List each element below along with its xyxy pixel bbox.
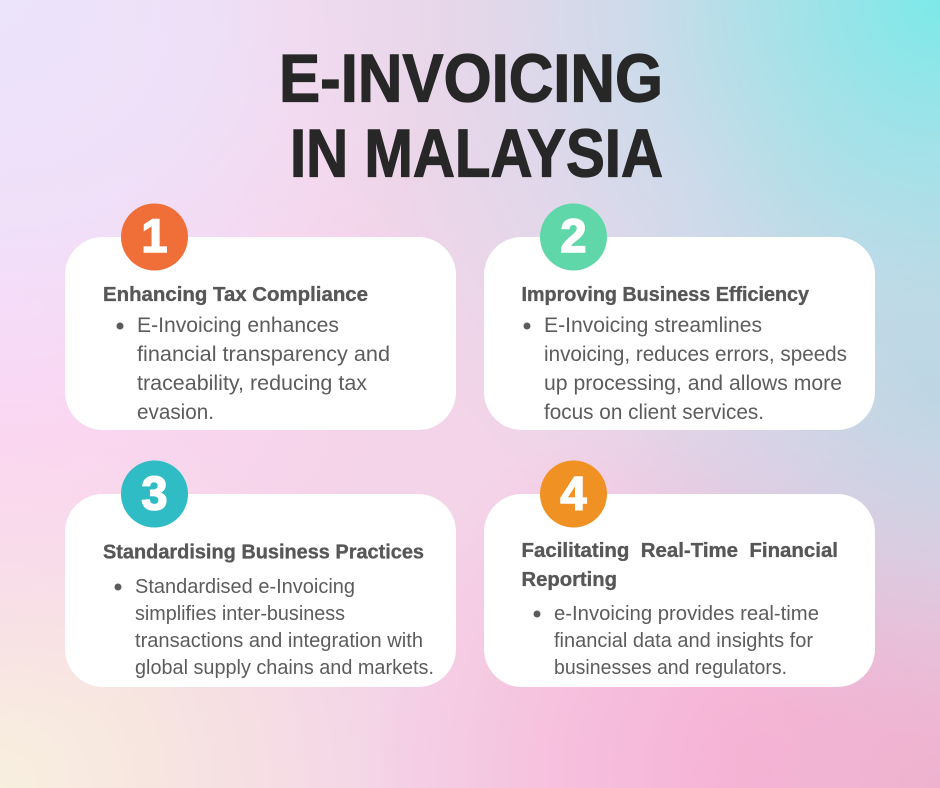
heading: facilitating real-time financial reporting: Facilitating Real-Time Financial — [522, 540, 838, 562]
bullet text: business efficiency: up processing, and allows more — [544, 372, 842, 395]
bullet text: tax compliance: evasion. — [137, 401, 214, 424]
bullet text: real-time reporting: businesses and regulators. — [554, 657, 787, 679]
bullet text: business efficiency: E-Invoicing streamlines — [544, 314, 762, 337]
bullet text: business efficiency: invoicing, reduces errors, speeds — [544, 343, 847, 366]
bullet text: tax compliance: E-Invoicing enhances — [137, 314, 339, 337]
heading: facilitating real-time financial reporting — [522, 540, 838, 591]
heading: enhancing tax compliance: Enhancing Tax Compliance — [103, 284, 368, 306]
badge: number 3: 3 — [141, 466, 168, 520]
panel: facilitating real-time financial reporting — [484, 460, 875, 687]
panel: standardising business practices — [65, 460, 456, 687]
title: IN MALAYSIA — [290, 116, 663, 192]
badge: number 2: 2 — [560, 209, 587, 262]
title: E-INVOICING — [279, 40, 663, 116]
bullet text: tax compliance: traceability, reducing tax — [137, 372, 368, 395]
bullet text: real-time reporting: financial data and insights for — [554, 630, 813, 652]
bullet text: tax compliance: financial transparency and — [137, 343, 390, 366]
badge: number 1: 1 — [141, 209, 168, 262]
badge: number 3 — [121, 460, 188, 528]
title — [279, 40, 663, 192]
bullet text: real-time reporting — [534, 603, 819, 679]
heading: standardising business practices: Standardising Business Practices — [103, 542, 424, 564]
bullet text: tax compliance — [116, 314, 390, 424]
bullet text: real-time reporting: e-Invoicing provides real-time — [554, 603, 819, 625]
bullet text: business efficiency — [524, 314, 847, 424]
panel: enhancing tax compliance — [65, 204, 456, 430]
bullet text: business practices: global supply chains and markets. — [135, 657, 434, 679]
bullet text: business practices: simplifies inter-business — [135, 603, 345, 625]
panel: improving business efficiency — [484, 204, 875, 430]
bullet text: business practices — [114, 576, 434, 679]
badge: number 1 — [121, 204, 188, 270]
badge: number 4 — [540, 460, 607, 528]
bullet text: business efficiency: focus on client services. — [544, 401, 764, 424]
badge: number 4: 4 — [560, 466, 587, 520]
badge: number 2 — [540, 204, 607, 270]
heading: improving business efficiency: Improving Business Efficiency — [522, 284, 810, 306]
heading: facilitating real-time financial reporting: Reporting — [522, 569, 617, 591]
bullet text: business practices: Standardised e-Invoicing — [135, 576, 355, 598]
bullet text: business practices: transactions and integration with — [135, 630, 423, 652]
